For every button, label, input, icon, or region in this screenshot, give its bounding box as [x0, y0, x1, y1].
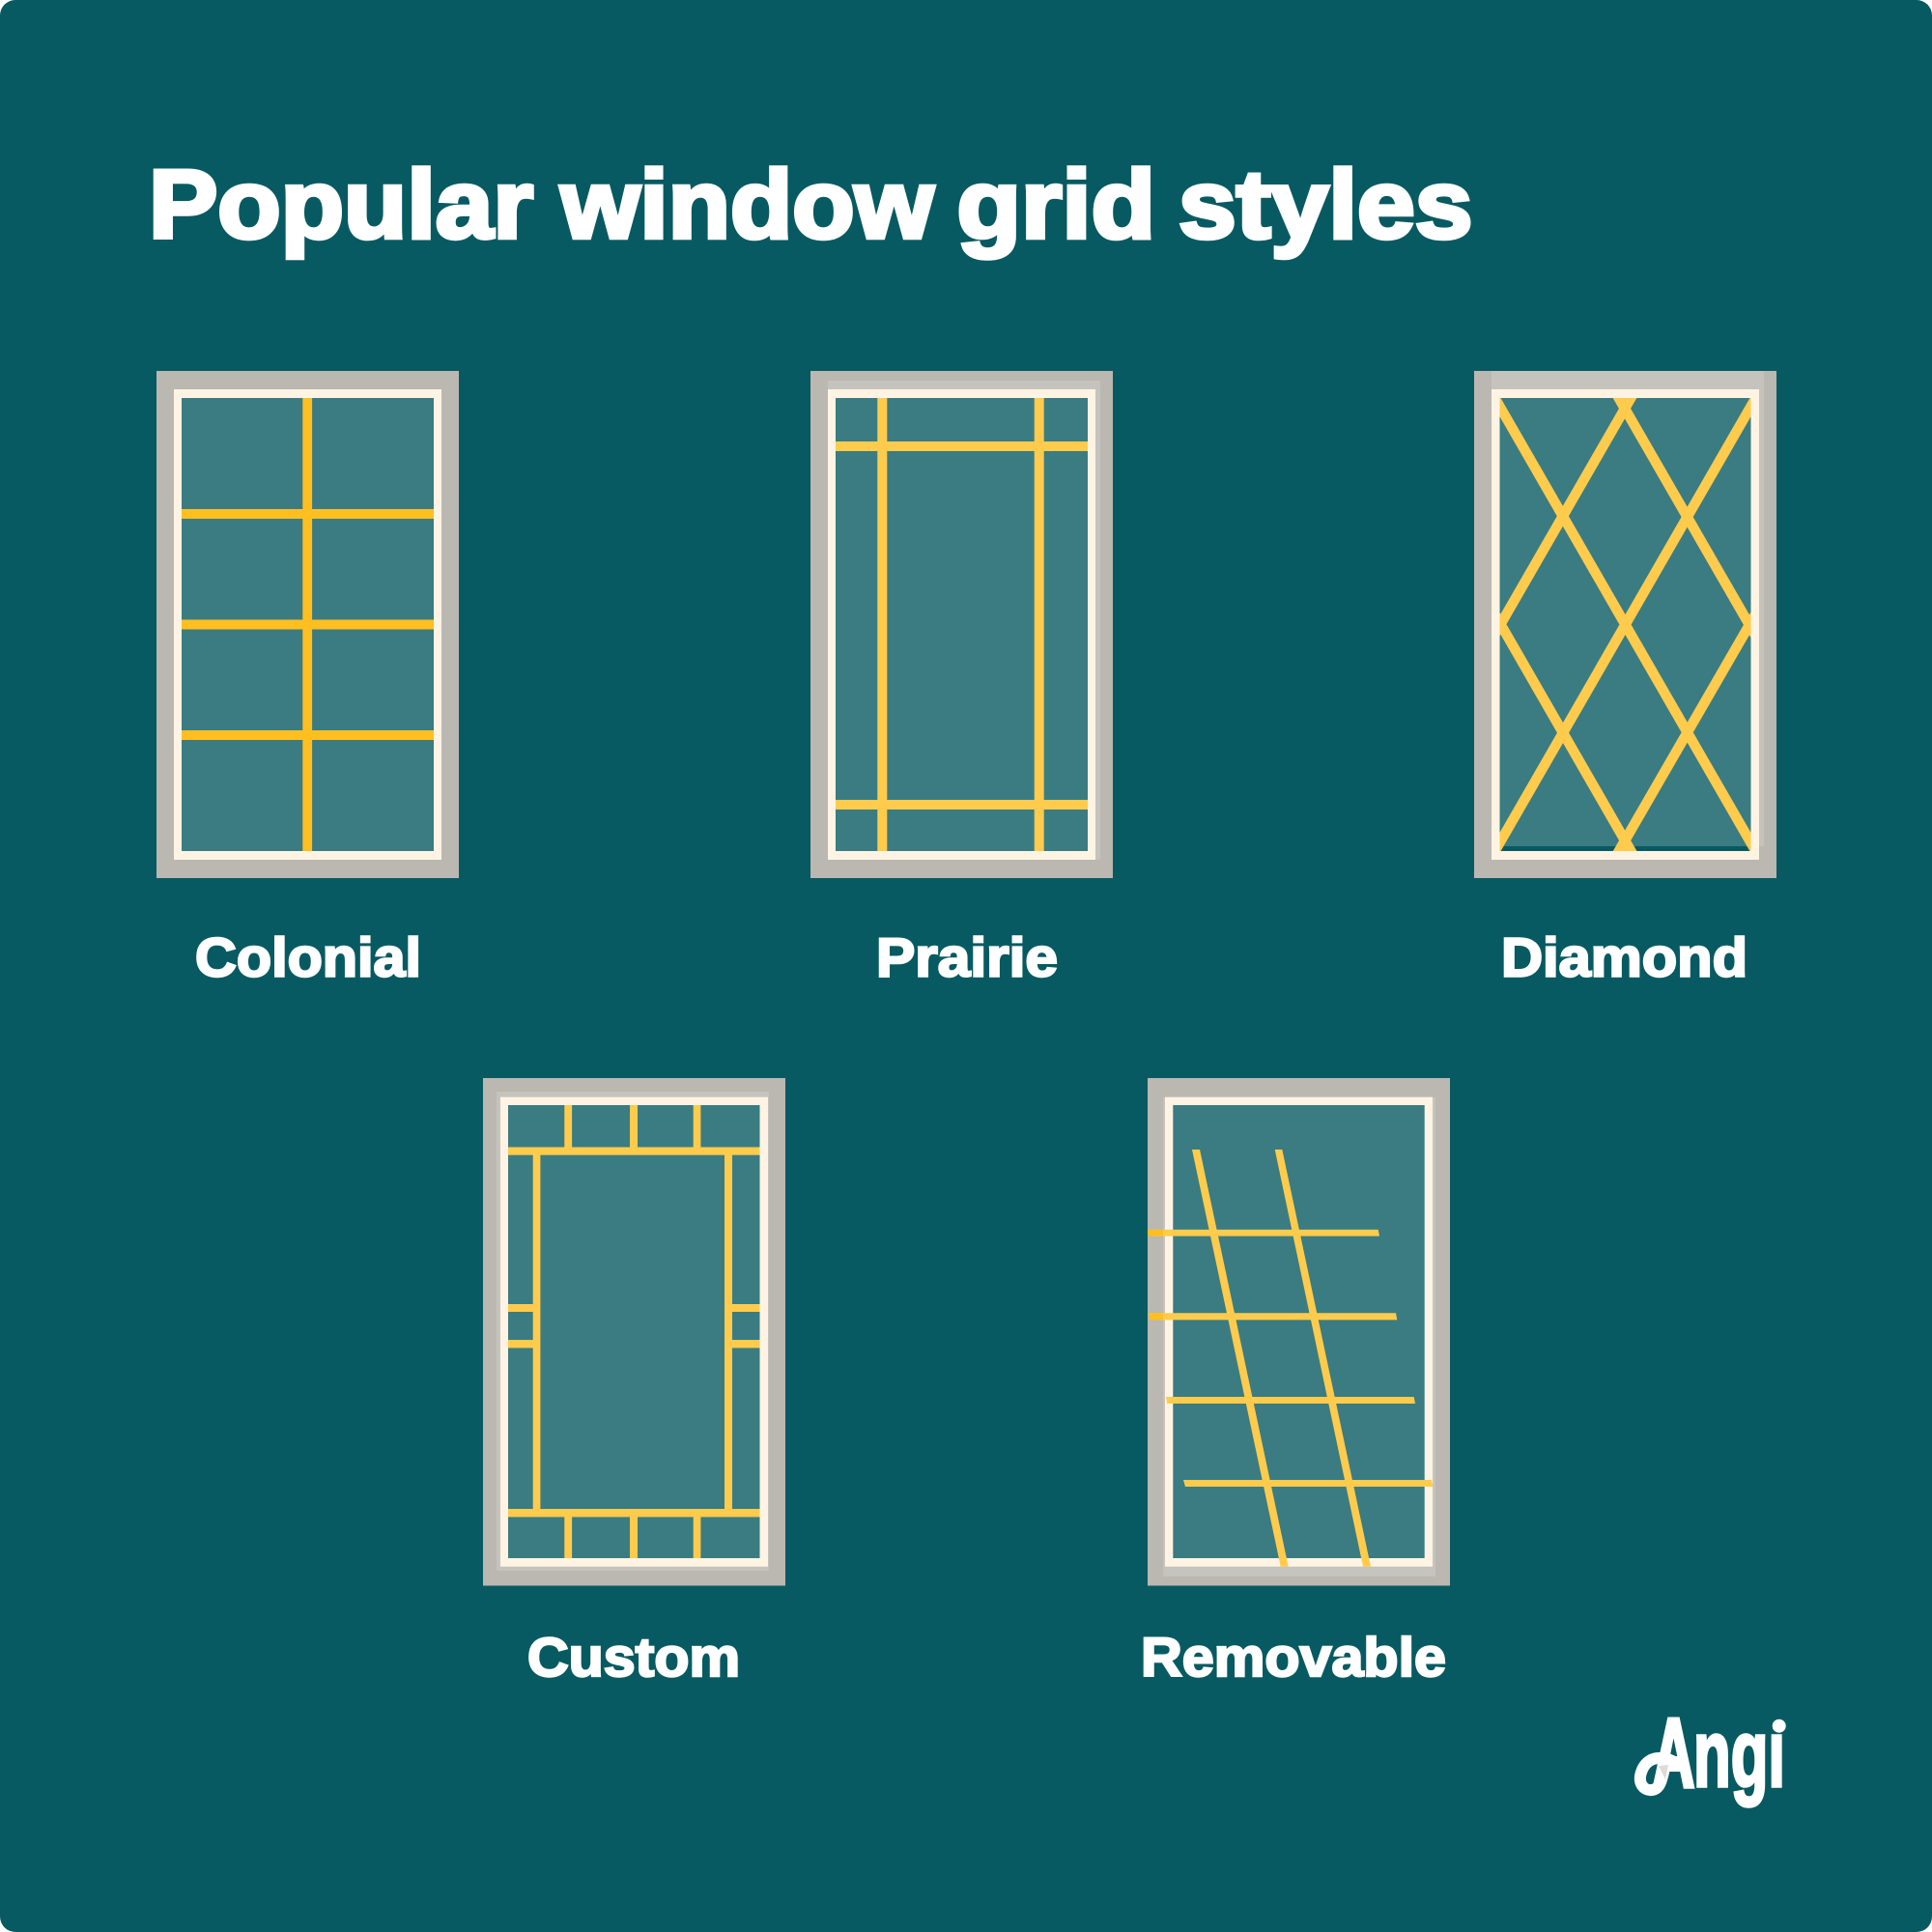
- title: window: [559, 151, 934, 259]
- label: Custom: Custom: [527, 1627, 740, 1689]
- logo dot: [1773, 1719, 1786, 1733]
- removable bars over frame: [1148, 1230, 1163, 1320]
- custom sash: [500, 1097, 768, 1567]
- diamond sash: [1492, 389, 1759, 860]
- panel: diamond window: [1474, 371, 1776, 878]
- label: Prairie: Prairie: [876, 927, 1058, 989]
- custom frame: [483, 1078, 785, 1586]
- diamond glass: [1499, 398, 1750, 851]
- label: Colonial: Colonial: [195, 927, 421, 989]
- title: Popular: [149, 151, 533, 259]
- removable sash: [1165, 1097, 1433, 1567]
- prairie glass: [836, 398, 1088, 851]
- custom glass: [508, 1105, 759, 1558]
- colonial frame: [156, 371, 459, 878]
- panel: colonial window: [156, 371, 459, 878]
- title: grid: [956, 151, 1155, 259]
- removable frame shade: [1163, 1097, 1435, 1577]
- logo letter A: A: [1653, 1699, 1694, 1807]
- colonial sash: [174, 389, 441, 860]
- custom grid bars: [508, 1105, 759, 1558]
- removable glass: [1173, 1105, 1425, 1558]
- logo fold: [1659, 1765, 1668, 1779]
- prairie grid bars: [836, 398, 1088, 851]
- colonial grid bars: [182, 398, 434, 851]
- title: [149, 151, 1472, 259]
- colonial glass: [182, 398, 434, 851]
- panel: prairie window: [810, 371, 1113, 878]
- prairie frame: [810, 371, 1113, 878]
- removable frame: [1148, 1078, 1450, 1586]
- logo swash: [1640, 1758, 1679, 1790]
- panel: removable window: [1148, 1078, 1450, 1586]
- logo: Angi: [1640, 1699, 1792, 1807]
- logo dot mask: [1771, 1710, 1792, 1734]
- diamond frame: [1474, 371, 1776, 878]
- label: Removable: Removable: [1141, 1627, 1446, 1689]
- panel: custom window: [483, 1078, 785, 1586]
- custom frame shade: [497, 1092, 769, 1571]
- removable grid bars: [1148, 1150, 1433, 1567]
- logo letters ngi: ngi: [1693, 1700, 1785, 1806]
- prairie sash: [828, 389, 1095, 860]
- label: Diamond: Diamond: [1501, 927, 1747, 989]
- title: styles: [1179, 151, 1472, 259]
- diamond bottom shadow: [1499, 846, 1750, 851]
- prairie frame shade: [828, 381, 1100, 860]
- diamond lattice: [1499, 398, 1750, 851]
- diamond frame shade: [1492, 371, 1764, 846]
